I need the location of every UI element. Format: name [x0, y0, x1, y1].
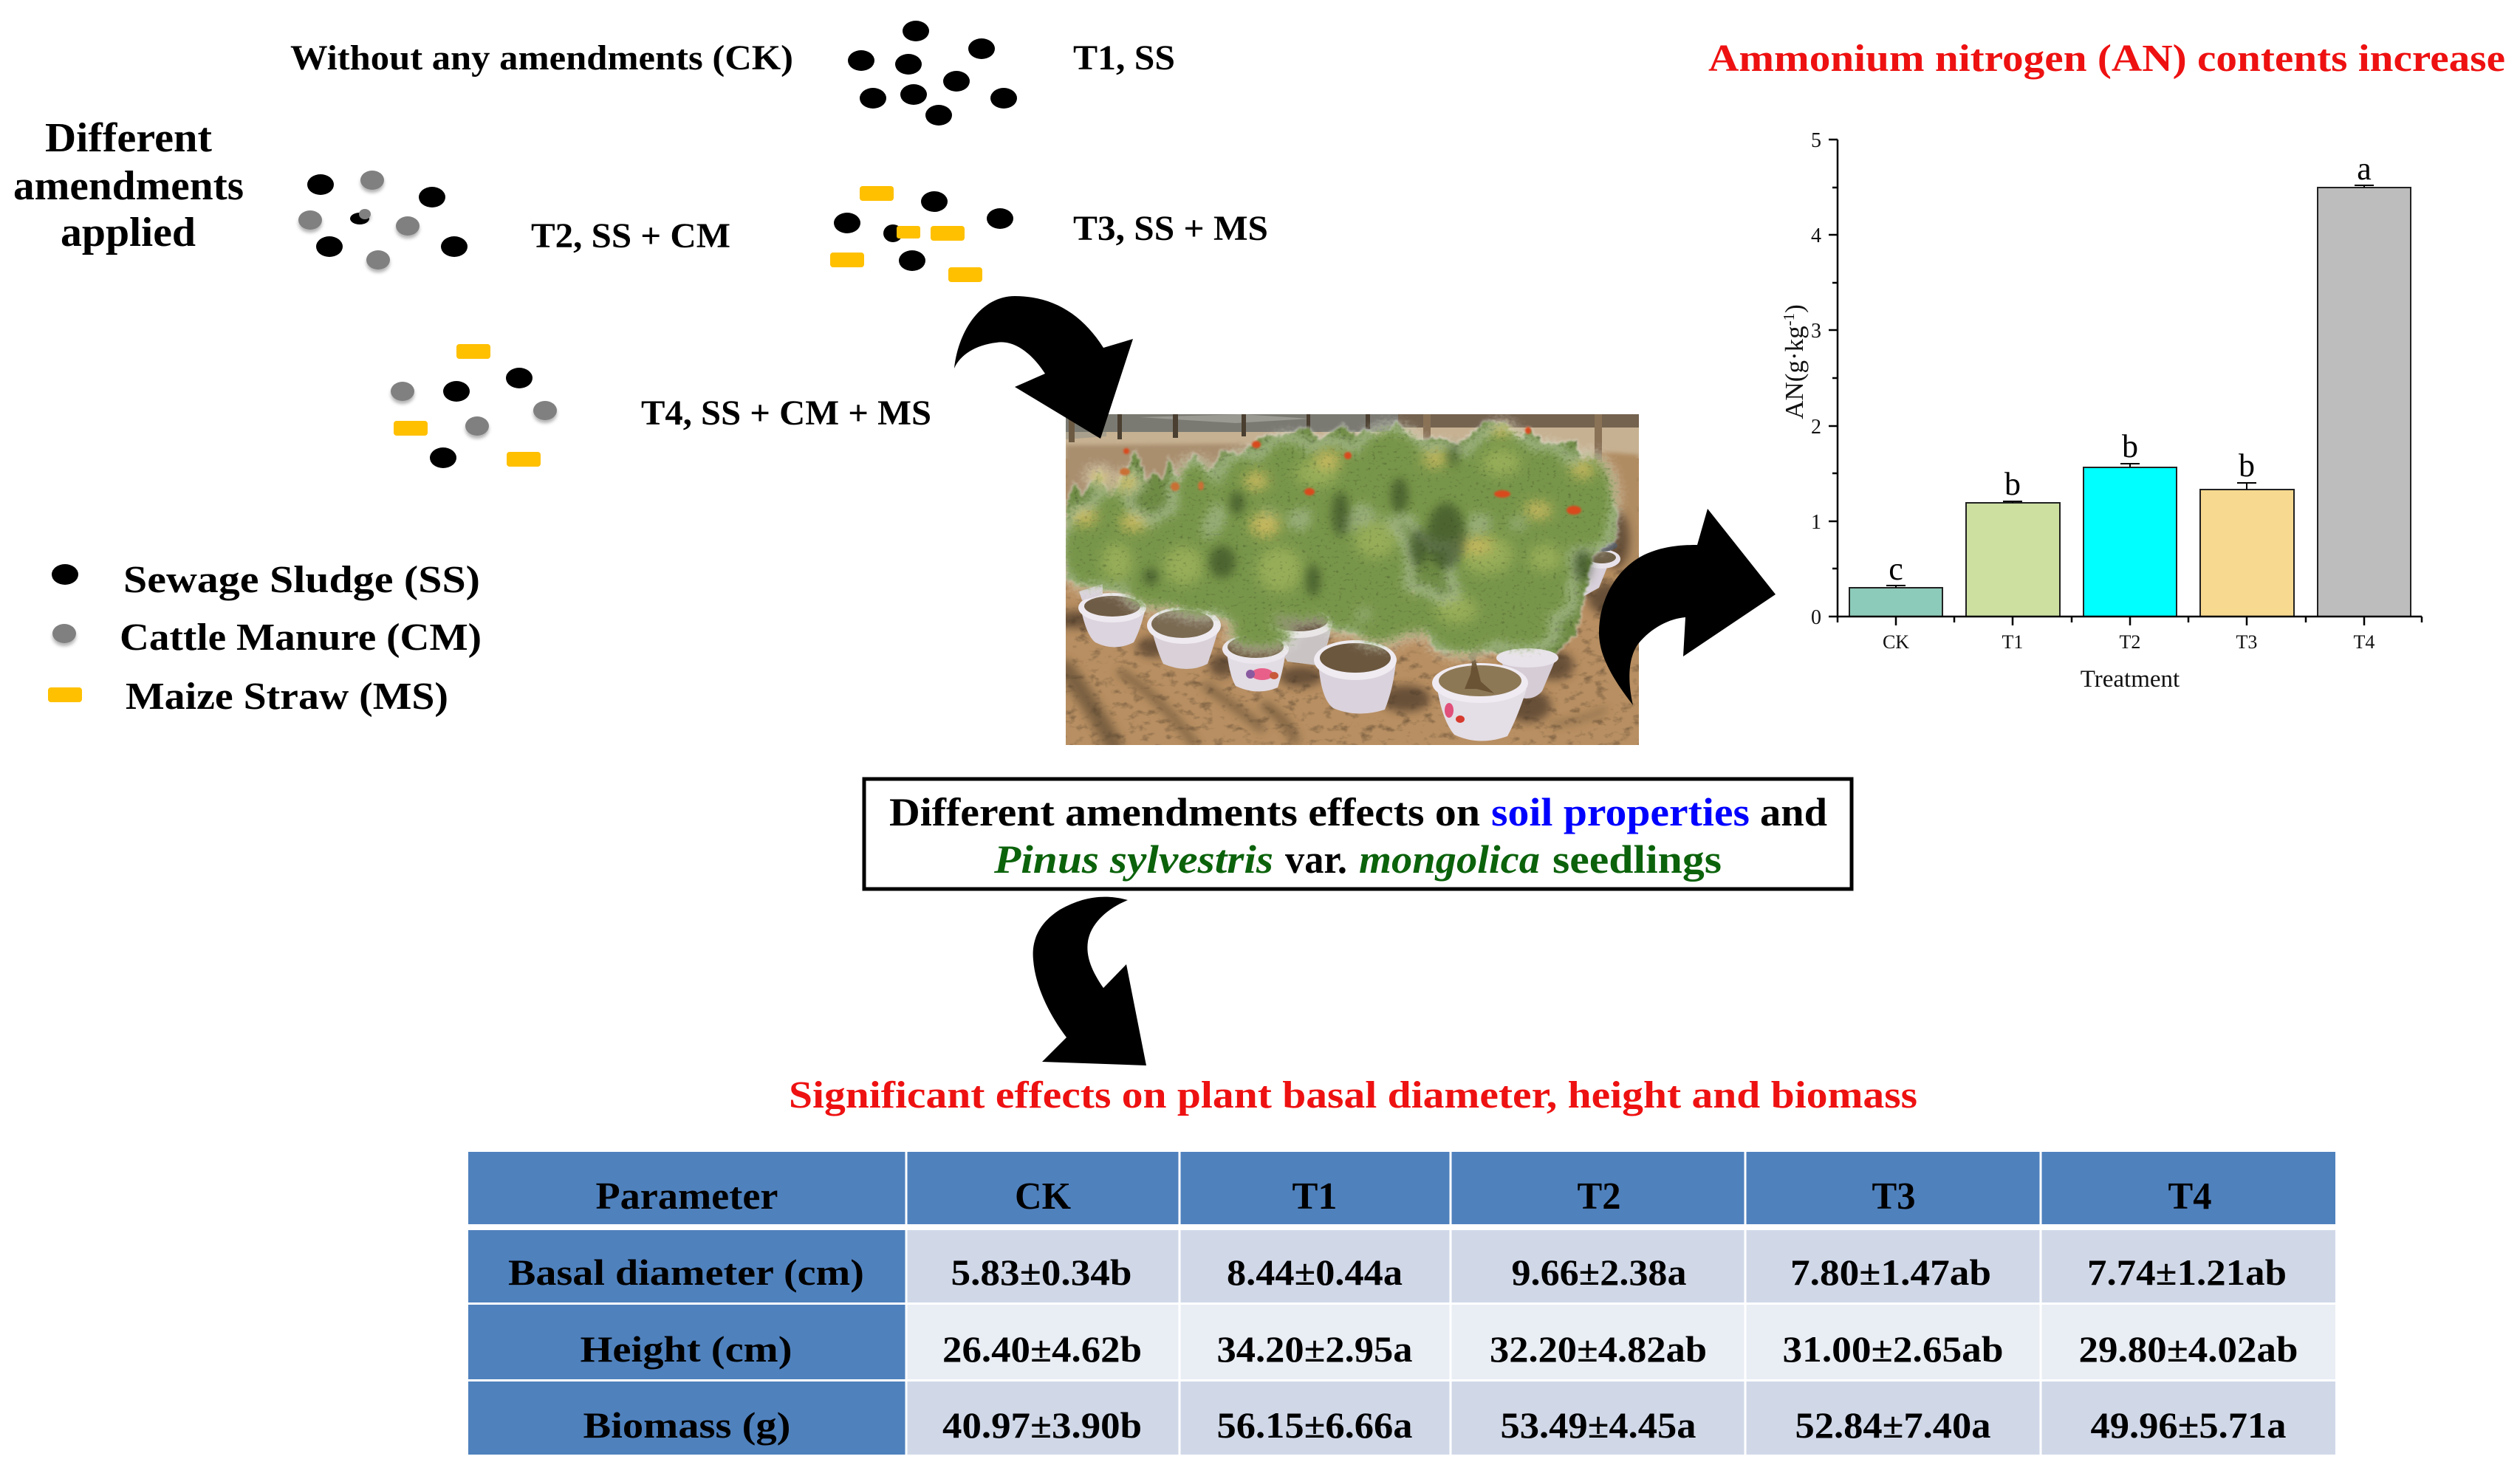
foreground foliage [1060, 422, 1617, 656]
dark gaps in canopy [1143, 443, 1592, 597]
text: T4 label: T4, SS + CM + MS [641, 394, 931, 433]
arrow: amendments to photo [954, 296, 1133, 439]
significance letters: b [2004, 466, 2021, 502]
arrow: statement to table [1033, 897, 1146, 1065]
table row: biomass: 49.96±5.71a [2090, 1404, 2287, 1446]
heading: AN contents increase: Ammonium nitrogen (AN) contents increase [1708, 38, 2505, 80]
heading: different amendments applied: applied [61, 210, 196, 255]
significance letters: b [2122, 428, 2138, 464]
table row: basal diameter: 7.80±1.47ab [1790, 1252, 1991, 1293]
pot F with flower [1432, 648, 1528, 741]
box: amendments effects statement: Pinus sylvestris [993, 837, 1273, 882]
pot A [1078, 593, 1146, 647]
pot E [1314, 640, 1397, 714]
table: plant parameters [468, 1152, 2335, 1455]
table row: biomass: 40.97±3.90b [942, 1404, 1142, 1446]
table row: height: 29.80±4.02ab [2078, 1328, 2298, 1370]
table row: height: 32.20±4.82ab [1490, 1328, 1707, 1370]
x tick labels: T3 [2236, 631, 2257, 653]
y tick labels [1811, 129, 1821, 629]
table row: height: 34.20±2.95a [1217, 1328, 1412, 1370]
box: amendments effects statement: Different amendments effects on [889, 790, 1480, 834]
box: amendments effects statement [864, 779, 1852, 889]
legend [48, 559, 482, 718]
table header row: Parameter [595, 1175, 778, 1218]
significance letters: a [2357, 151, 2372, 187]
table row: height: Height (cm) [581, 1328, 792, 1370]
x tick labels: T4 [2354, 631, 2375, 653]
table row: biomass: 56.15±6.66a [1217, 1404, 1412, 1446]
significance letters [1889, 151, 2372, 587]
soil furrows [1066, 669, 1605, 745]
back foliage mass [1066, 420, 1618, 662]
y tick labels: 0 [1811, 606, 1821, 629]
pot C with flower [1222, 634, 1289, 692]
significance letters: c [1889, 551, 1903, 587]
back pots right [1582, 542, 1620, 597]
table row: basal diameter: 7.74±1.21ab [2087, 1252, 2287, 1293]
pot B [1147, 607, 1221, 669]
photo: potted pine seedlings [1055, 414, 1639, 745]
table row: basal diameter: Basal diameter (cm) [508, 1252, 864, 1293]
pot G [1496, 648, 1558, 698]
x tick labels [1883, 631, 2375, 653]
table header row: CK [1015, 1175, 1072, 1218]
text: T3 label: T3, SS + MS [1073, 209, 1268, 248]
y tick labels: 5 [1811, 129, 1821, 152]
table row: basal diameter: 8.44±0.44a [1227, 1252, 1403, 1293]
box: amendments effects statement: seedlings [1552, 837, 1722, 882]
y axis title: ) [1780, 304, 1809, 313]
pot shadows [1055, 510, 1629, 722]
table row: basal diameter [508, 1252, 2287, 1293]
significance letters: b [2239, 447, 2255, 484]
background road and fence [1066, 414, 1639, 599]
axes [1829, 140, 2422, 625]
table row: biomass: 53.49±4.45a [1501, 1404, 1696, 1446]
table header row [595, 1175, 2211, 1218]
legend item: cattle manure: Cattle Manure (CM) [120, 617, 482, 659]
pot D [1270, 611, 1332, 665]
error bars [1886, 185, 2374, 588]
y axis title: -1 [1780, 313, 1798, 326]
y tick labels: 1 [1811, 511, 1821, 534]
icon: T4 SS, CM and MS dots [391, 344, 557, 468]
legend item: sewage sludge: Sewage Sludge (SS) [123, 559, 480, 601]
y axis title: AN(g·kg [1780, 326, 1809, 419]
bar chart: AN by treatment [1780, 129, 2422, 693]
table row: height: 31.00±2.65ab [1783, 1328, 2003, 1370]
icon: T2 SS and CM dots [298, 171, 468, 270]
table header row: T1 [1292, 1175, 1337, 1218]
x tick labels: T2 [2120, 631, 2140, 653]
x tick labels: CK [1883, 631, 1909, 653]
table row: height [581, 1328, 2298, 1370]
text: without any amendments CK: Without any amendments (CK) [290, 38, 793, 78]
box: amendments effects statement: mongolica [1359, 837, 1540, 882]
bars [1849, 188, 2411, 617]
y tick labels: 2 [1811, 416, 1821, 439]
box: amendments effects statement: soil properties [1491, 790, 1750, 834]
small back pot left [1079, 584, 1103, 600]
y tick labels: 4 [1811, 224, 1821, 247]
heading: different amendments applied: amendments [13, 163, 244, 209]
heading: significant effects: Significant effects on plant basal diameter, height and biomass [789, 1074, 1917, 1116]
icon: CK/T1 sewage sludge dots [848, 21, 1017, 126]
table row: biomass: Biomass (g) [583, 1404, 790, 1446]
icon: T3 SS and MS dots [830, 186, 1013, 282]
table row: basal diameter: 9.66±2.38a [1511, 1252, 1687, 1293]
x axis title: Treatment [2081, 666, 2180, 693]
table header row: T2 [1578, 1175, 1620, 1218]
x tick labels: T1 [2002, 631, 2023, 653]
heading: different amendments applied: Different [45, 115, 212, 161]
table row: biomass [583, 1404, 2287, 1446]
box: amendments effects statement: and [1760, 790, 1827, 834]
text: T1 label: T1, SS [1073, 38, 1175, 78]
text: T2 label: T2, SS + CM [531, 216, 730, 255]
heading: different amendments applied [13, 115, 244, 255]
table row: basal diameter: 5.83±0.34b [951, 1252, 1131, 1293]
arrow: photo to chart [1599, 509, 1776, 705]
table backgrounds [468, 1152, 2335, 1455]
red and orange tips [1120, 427, 1581, 515]
table header row: T3 [1872, 1175, 1916, 1218]
table row: height: 26.40±4.62b [942, 1328, 1142, 1370]
box: amendments effects statement: var. [1285, 837, 1347, 882]
table row: biomass: 52.84±7.40a [1795, 1404, 1991, 1446]
table header row: T4 [2168, 1175, 2211, 1218]
legend item: maize straw: Maize Straw (MS) [126, 676, 448, 718]
y tick labels: 3 [1811, 320, 1821, 343]
